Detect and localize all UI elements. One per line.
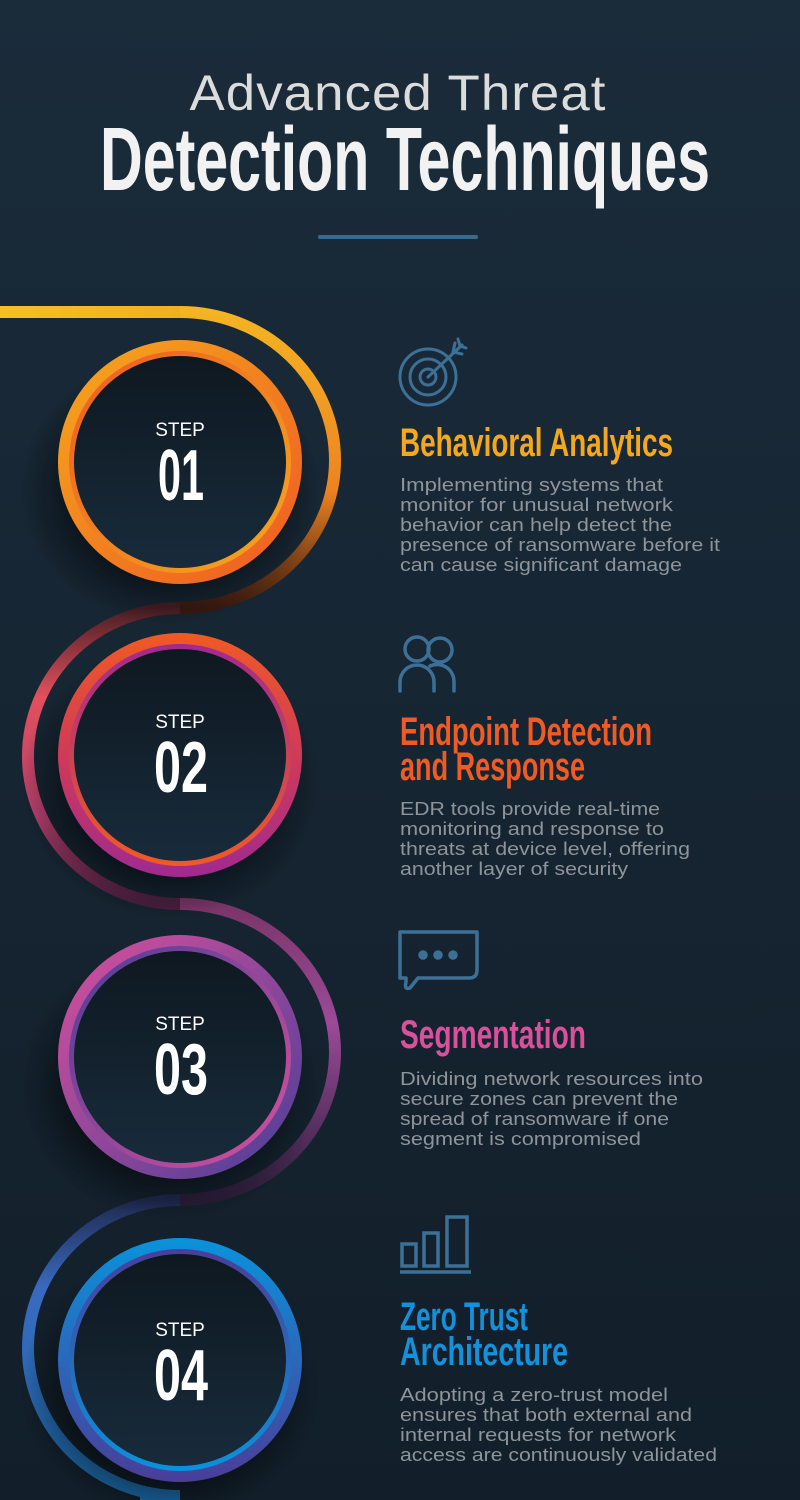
text: step 3 description: Dividing network resources into	[400, 1069, 703, 1089]
text: step 3 description	[400, 1069, 703, 1149]
step 02 circle: 02	[154, 728, 208, 808]
icon: people	[400, 637, 454, 691]
text: step 3 description: spread of ransomware if one	[400, 1109, 669, 1129]
text: step 2 description	[400, 799, 690, 879]
text: step 4 description	[400, 1385, 717, 1465]
heading: Segmentation: Segmentation	[400, 1013, 586, 1057]
text: step 2 description: EDR tools provide real-time	[400, 799, 660, 819]
text: step 1 description	[400, 475, 720, 575]
text: step 4 description: access are continuously validated	[400, 1445, 717, 1465]
step 01 circle	[20, 340, 320, 625]
icon: target	[400, 339, 466, 405]
step 04 circle: 04	[154, 1336, 208, 1416]
text: step 4 description: Adopting a zero-trust model	[400, 1385, 668, 1405]
step 02 circle: STEP	[155, 712, 205, 733]
heading: Endpoint Detection and Response: and Response	[400, 745, 585, 789]
connecting path	[0, 312, 335, 1496]
heading: Endpoint Detection and Response	[400, 710, 652, 789]
text: step 1 description: behavior can help detect the	[400, 515, 672, 535]
heading: Zero Trust Architecture: Zero Trust	[400, 1295, 528, 1339]
step 04 circle	[20, 1238, 320, 1500]
text: step 3 description: secure zones can prevent the	[400, 1089, 678, 1109]
step 03 circle: STEP	[155, 1014, 205, 1035]
title: Advanced Threat	[190, 65, 606, 121]
title	[100, 65, 710, 210]
step 03 circle	[20, 935, 320, 1220]
step 04 circle: STEP	[155, 1320, 205, 1341]
icon: chat	[400, 932, 477, 988]
text: step 2 description: another layer of security	[400, 859, 628, 879]
text: step 3 description: segment is compromised	[400, 1129, 641, 1149]
step 01 circle: STEP	[155, 420, 205, 441]
text: step 1 description: Implementing systems that	[400, 475, 663, 495]
text: step 4 description: internal requests for network	[400, 1425, 677, 1445]
text: step 2 description: threats at device level, offering	[400, 839, 690, 859]
heading: Endpoint Detection and Response: Endpoint Detection	[400, 710, 652, 754]
text: step 4 description: ensures that both external and	[400, 1405, 692, 1425]
text: step 1 description: can cause significant damage	[400, 555, 682, 575]
heading: Zero Trust Architecture	[400, 1295, 568, 1374]
step 03 circle: 03	[154, 1030, 208, 1110]
icon: bar chart	[400, 1217, 471, 1272]
text: step 1 description: presence of ransomware before it	[400, 535, 720, 555]
heading: Behavioral Analytics: Behavioral Analytics	[400, 421, 673, 465]
heading: Zero Trust Architecture: Architecture	[400, 1330, 568, 1374]
text: step 2 description: monitoring and response to	[400, 819, 664, 839]
step 02 circle	[20, 633, 320, 918]
text: step 1 description: monitor for unusual network	[400, 495, 674, 515]
step 01 circle: 01	[158, 436, 204, 516]
